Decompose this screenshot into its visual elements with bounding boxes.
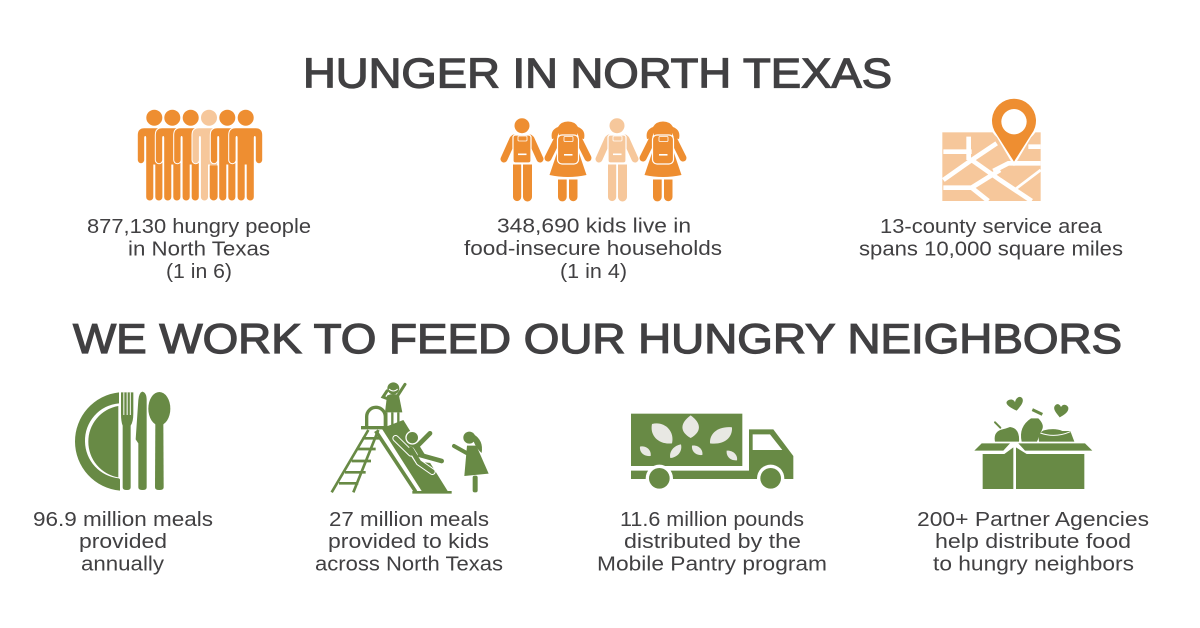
- text: hungry people: (1 in 6): [166, 261, 232, 283]
- text: kids in food-insecure households: (1 in 4): [560, 261, 627, 283]
- text: kids in food-insecure households: [464, 216, 722, 283]
- text: meals provided annually: provided: [79, 531, 167, 553]
- text: hungry people: 877,130 hungry people: [87, 216, 311, 238]
- text: meals for kids: 27 million meals: [329, 509, 489, 531]
- text: kids in food-insecure households: 348,690 kids live in: [497, 216, 691, 238]
- text: service area: [859, 216, 1123, 260]
- text: partner agencies: [917, 509, 1149, 576]
- text: hungry people: in North Texas: [128, 238, 270, 260]
- icon: mobile pantry truck with leaves: [631, 414, 793, 492]
- icon: four children with backpacks: [504, 118, 683, 202]
- text: mobile pantry pounds: Mobile Pantry program: [597, 554, 827, 576]
- text: meals for kids: [315, 509, 503, 576]
- text: meals provided annually: annually: [81, 554, 164, 576]
- text: service area: 13-county service area: [880, 216, 1103, 238]
- text: service area: spans 10,000 square miles: [859, 238, 1123, 260]
- text: kids in food-insecure households: food-insecure households: [464, 238, 722, 260]
- icon: children on a playground slide: [332, 382, 489, 492]
- text: mobile pantry pounds: 11.6 million pounds: [620, 509, 804, 531]
- title: hunger in north texas: HUNGER IN NORTH TEXAS: [303, 50, 892, 96]
- icon: plate and cutlery: [75, 392, 170, 491]
- text: meals provided annually: 96.9 million meals: [33, 509, 213, 531]
- text: mobile pantry pounds: [597, 509, 827, 576]
- text: meals for kids: provided to kids: [328, 531, 489, 553]
- text: hungry people: [87, 216, 311, 283]
- text: partner agencies: to hungry neighbors: [933, 554, 1134, 576]
- icon: food donation box with hearts: [974, 397, 1092, 489]
- icon: map with location pin: [942, 94, 1041, 201]
- heading: we work to feed our hungry neighbors: WE WORK TO FEED OUR HUNGRY NEIGHBORS: [73, 315, 1122, 362]
- text: meals provided annually: [33, 509, 213, 576]
- icon: six people, one highlighted: [137, 110, 263, 201]
- text: mobile pantry pounds: distributed by the: [624, 531, 801, 553]
- text: partner agencies: 200+ Partner Agencies: [917, 509, 1149, 531]
- text: partner agencies: help distribute food: [935, 531, 1131, 553]
- text: meals for kids: across North Texas: [315, 554, 503, 576]
